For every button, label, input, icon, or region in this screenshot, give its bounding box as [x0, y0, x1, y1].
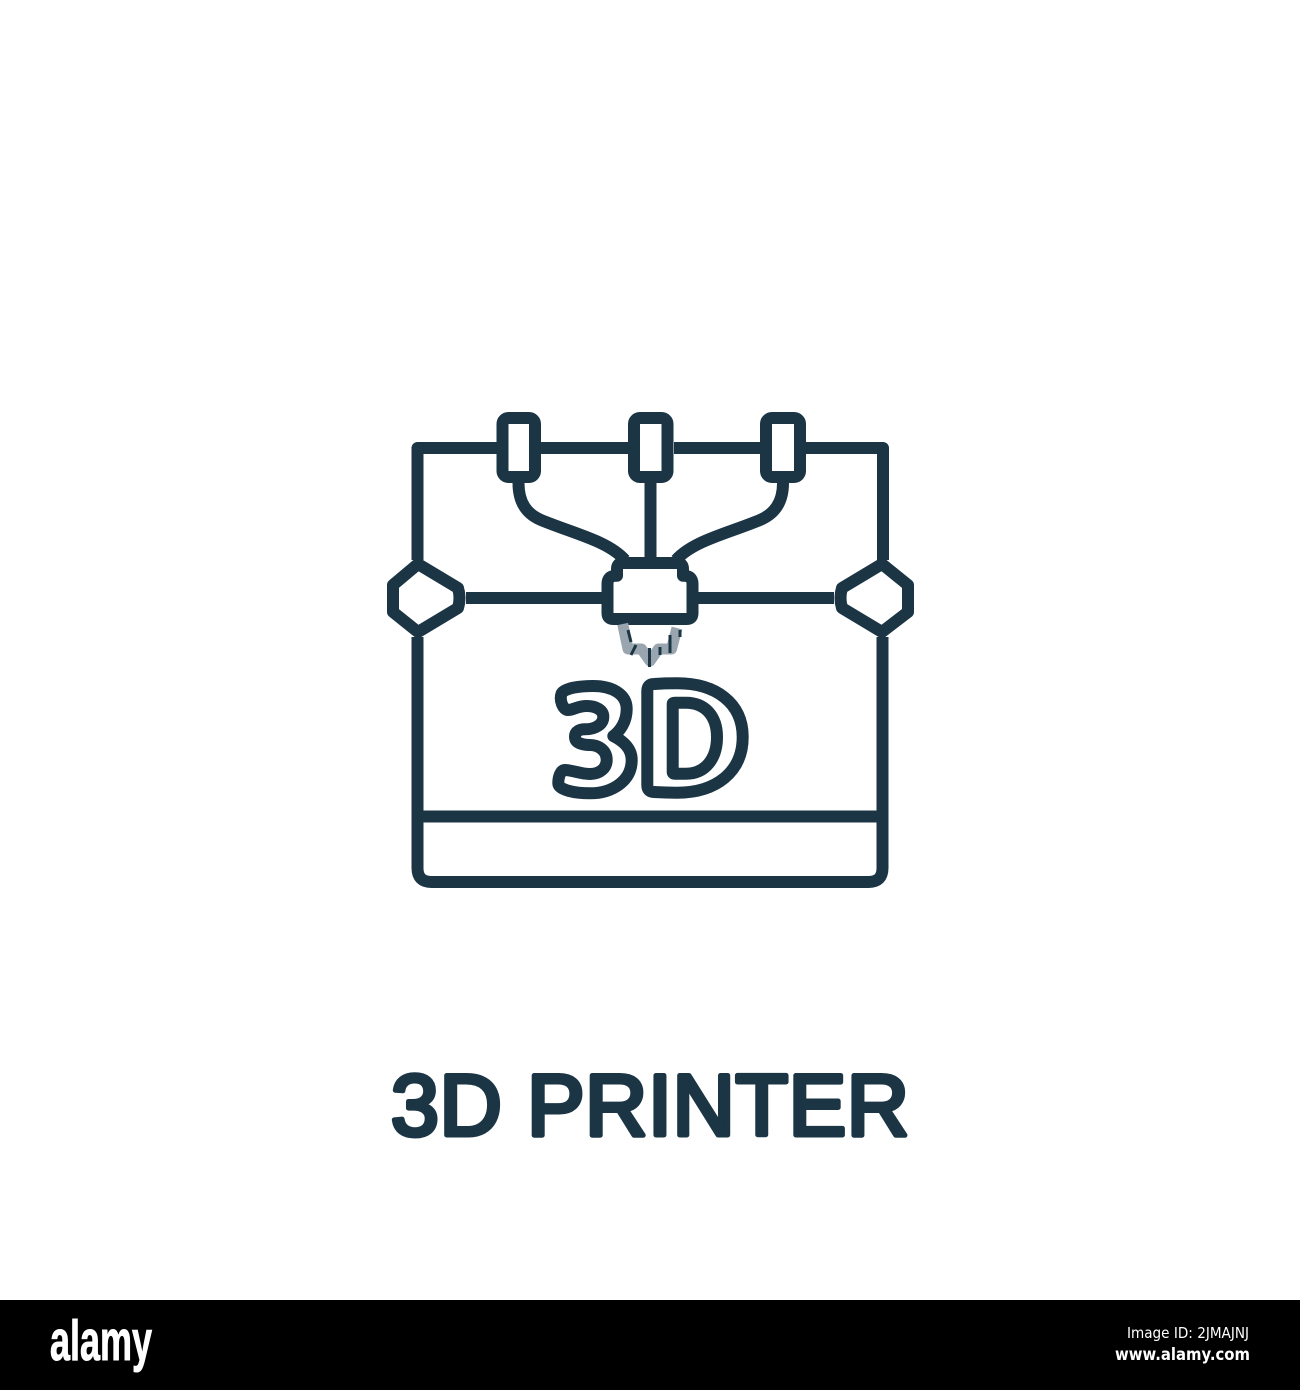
right hexagon joint [840, 564, 908, 632]
icon: 3D printer [393, 418, 908, 882]
title: 3D PRINTER [391, 1058, 909, 1154]
left hexagon joint [393, 564, 460, 632]
image id: Image ID: 2JMAJNJ [1127, 1324, 1249, 1342]
filament cartridges [502, 418, 800, 477]
watermark footer band [0, 1300, 1300, 1390]
filament feed tubes [518, 483, 783, 560]
print head carriage [608, 563, 692, 619]
icon lettering: 3D [558, 683, 743, 793]
print nozzle [623, 624, 680, 667]
website: www.alamy.com [1115, 1345, 1250, 1365]
printer frame [418, 448, 883, 882]
alamy logo: alamy [50, 1309, 152, 1373]
horizontal rail [466, 592, 834, 604]
